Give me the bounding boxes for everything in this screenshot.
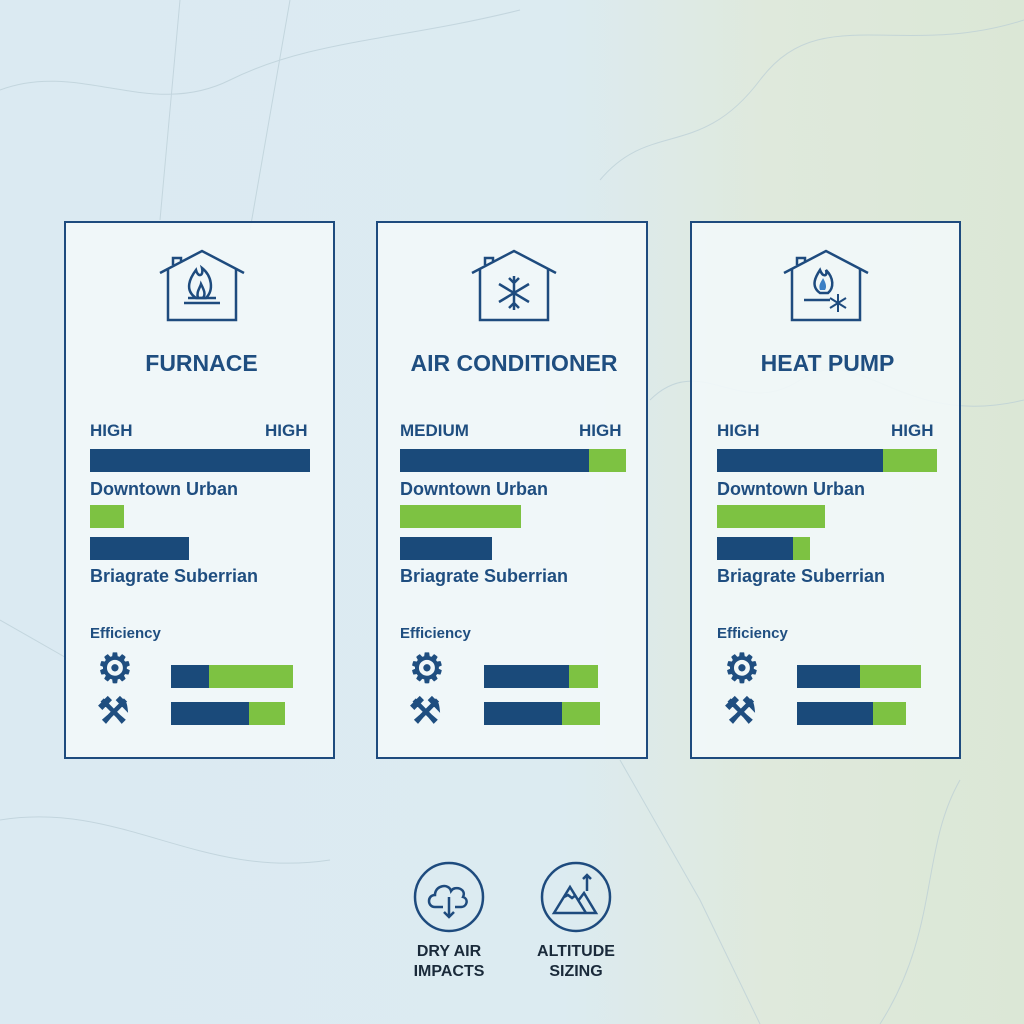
icon: dry air <box>414 862 484 932</box>
label: dry air impacts <box>414 943 484 980</box>
text: efficiency: Efficiency <box>90 625 161 642</box>
bars: efficiency <box>171 665 293 725</box>
icon: tools: ⚒ <box>97 690 129 731</box>
panel: air conditioner: MEDIUM <box>400 421 469 440</box>
heading: FURNACE <box>145 350 258 376</box>
label: dry air impacts: DRY AIR <box>417 943 481 960</box>
panel: furnace <box>64 221 335 759</box>
bars: efficiency <box>797 665 921 725</box>
heading: HEAT PUMP <box>761 350 894 376</box>
panel: heat pump: HIGH <box>717 421 760 440</box>
text: briagrate: Briagrate Suberrian <box>717 566 885 586</box>
bar: medium/high <box>400 421 626 472</box>
text: efficiency: Efficiency <box>717 625 788 642</box>
icon: gear: ⚙ <box>724 647 760 691</box>
text: efficiency: Efficiency <box>400 625 471 642</box>
heading: AIR CONDITIONER <box>410 350 618 376</box>
icon: altitude <box>540 862 612 932</box>
bars: region <box>717 505 825 560</box>
text: briagrate: Briagrate Suberrian <box>400 566 568 586</box>
icon: house with flame <box>160 250 244 322</box>
icon: tools: ⚒ <box>724 690 756 731</box>
icon: house with snowflake <box>472 250 556 322</box>
bars: region <box>90 505 189 560</box>
label: altitude sizing <box>537 943 615 980</box>
text: downtown urban: Downtown Urban <box>90 479 238 499</box>
text: downtown urban: Downtown Urban <box>717 479 865 499</box>
icon: gear: ⚙ <box>409 647 445 691</box>
icon: tools: ⚒ <box>409 690 441 731</box>
icon: house with flame and snowflake <box>784 250 868 322</box>
bar: high <box>717 421 937 472</box>
bar: high <box>90 421 310 472</box>
bars: region <box>400 505 521 560</box>
label: altitude sizing: SIZING <box>549 963 603 980</box>
bars: efficiency <box>484 665 600 725</box>
panel: air conditioner <box>376 221 648 759</box>
panel: air conditioner: HIGH <box>579 421 622 440</box>
panel: heat pump <box>690 221 961 759</box>
icon: gear: ⚙ <box>97 647 133 691</box>
panel: furnace: HIGH <box>265 421 308 440</box>
panel: furnace: HIGH <box>90 421 132 440</box>
label: altitude sizing: ALTITUDE <box>537 943 615 960</box>
text: downtown urban: Downtown Urban <box>400 479 548 499</box>
label: dry air impacts: IMPACTS <box>414 963 484 980</box>
panel: heat pump: HIGH <box>891 421 934 440</box>
text: briagrate: Briagrate Suberrian <box>90 566 258 586</box>
